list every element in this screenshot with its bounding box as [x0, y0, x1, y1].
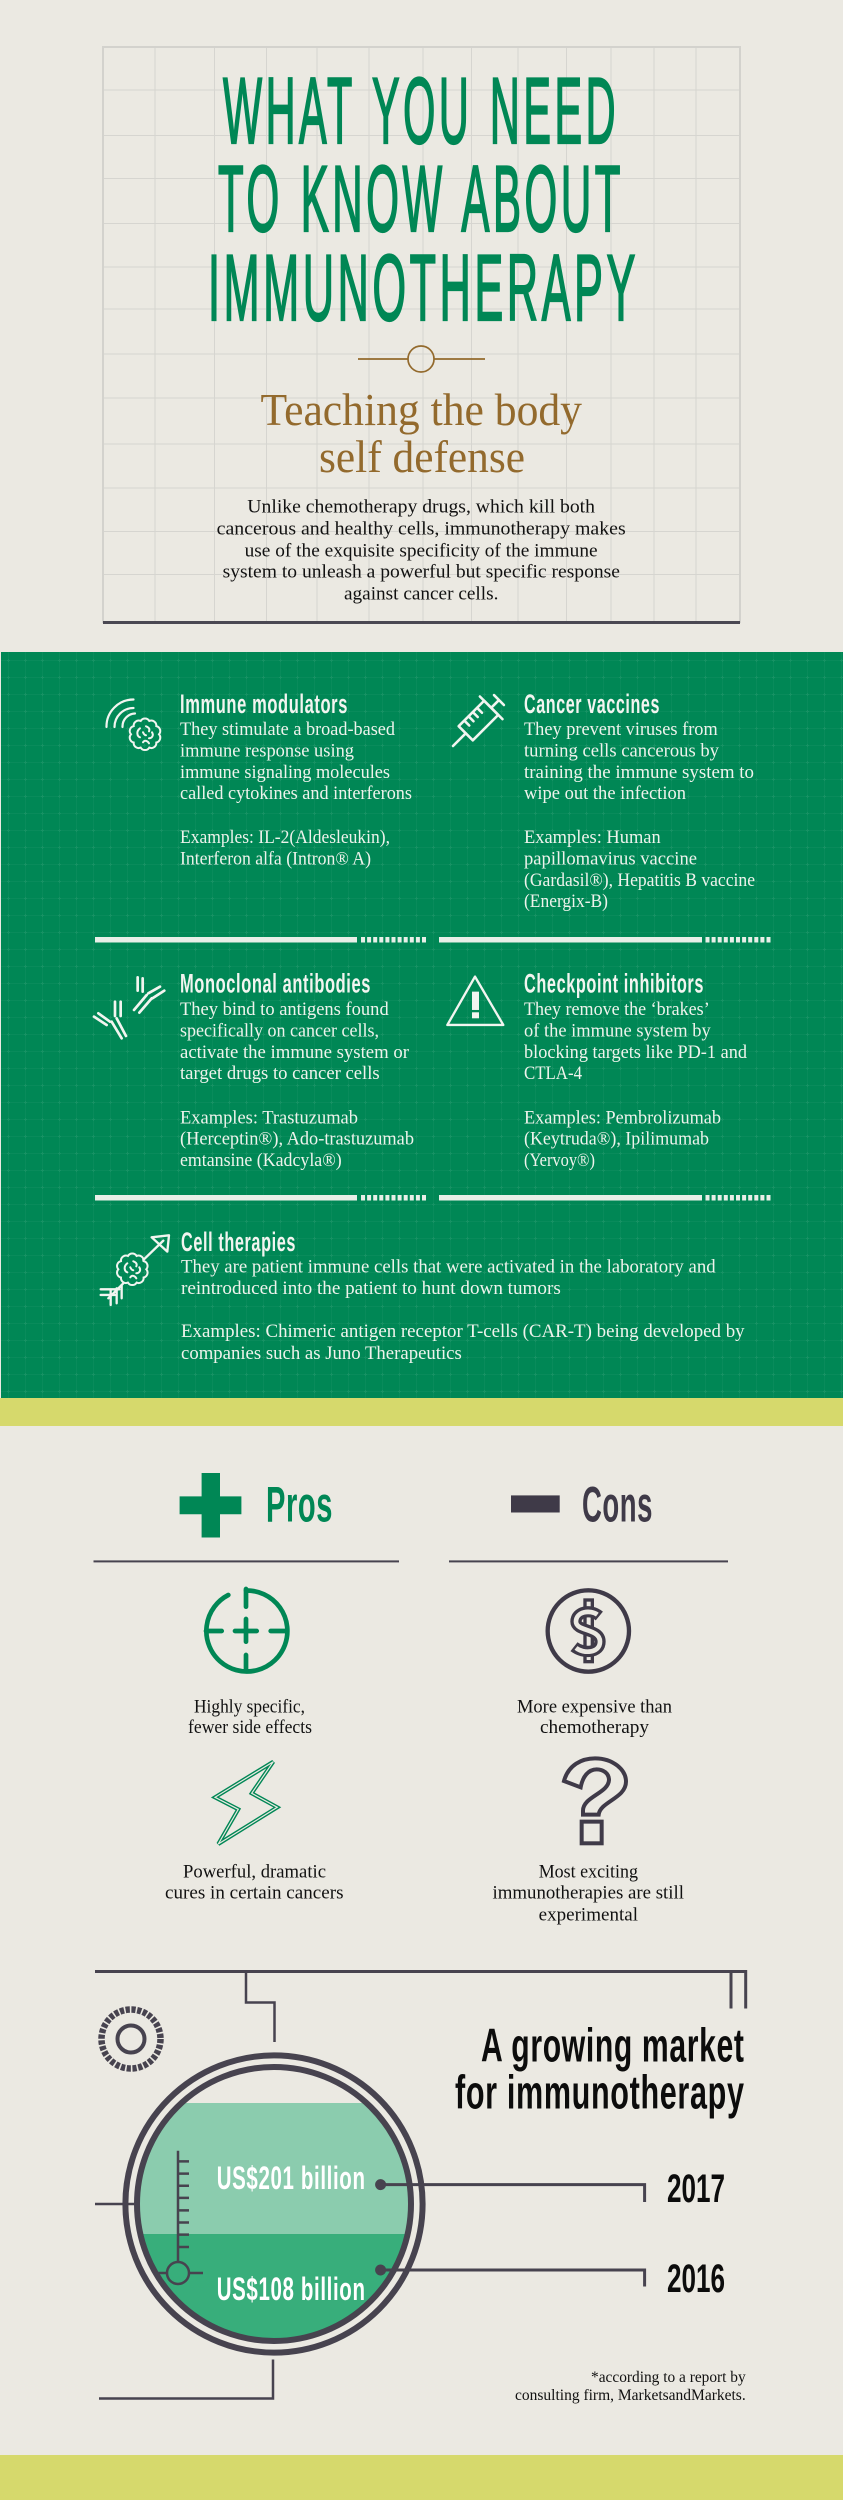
icon: plus: [180, 1473, 241, 1538]
description: immune signaling molecules: [180, 762, 390, 783]
text: most exciting: [492, 1862, 684, 1926]
description: Examples: Pembrolizumab: [524, 1108, 721, 1128]
description: [524, 719, 755, 912]
icon: dollar coin: [548, 1590, 629, 1672]
subtitle: Teaching the body: [260, 384, 582, 435]
description: (Gardasil®), Hepatitis B vaccine: [524, 870, 755, 891]
footnote: *according to a report by: [591, 2369, 746, 2386]
description: (Herceptin®), Ado-trastuzumab: [180, 1128, 414, 1150]
description: papillomavirus vaccine: [524, 848, 697, 869]
icon: cell with arrow: [101, 1235, 169, 1305]
icon: signal waves and cell: [106, 700, 160, 750]
text: highly specific: fewer side effects: [188, 1718, 312, 1738]
heading: growing market: [455, 2018, 745, 2119]
icon: gear ring: [102, 2010, 160, 2068]
text: highly specific: Highly specific,: [194, 1698, 305, 1718]
monoclonal antibodies block: [94, 969, 414, 1171]
description: Examples: Human: [524, 827, 661, 848]
heading: pros: Pros: [266, 1476, 333, 1532]
description: Examples: IL-2(Aldesleukin),: [180, 827, 390, 848]
description: blocking targets like PD-1 and: [524, 1042, 747, 1063]
description: They stimulate a broad-based: [180, 719, 395, 740]
checkpoint inhibitors block: [447, 969, 747, 1171]
icon: syringe: [442, 689, 510, 757]
description: specifically on cancer cells,: [180, 1021, 379, 1042]
description: Interferon alfa (Intron® A): [180, 848, 371, 869]
panel: types of immunotherapy: [1, 652, 843, 1398]
description: reintroduced into the patient to hunt down tumors: [181, 1278, 561, 1299]
intro paragraph: [217, 496, 626, 604]
value: 2017: US$201 billion: [217, 2160, 366, 2196]
band: bottom stripe: [0, 2455, 843, 2500]
description: [180, 999, 414, 1171]
description: [524, 999, 747, 1171]
icon: antibodies: [94, 977, 164, 1038]
text: more expensive: More expensive than: [517, 1698, 672, 1718]
title: [208, 58, 639, 340]
text: highly specific: [188, 1698, 312, 1738]
panel: intro grid card: [103, 46, 740, 624]
intro paragraph: cancerous and healthy cells, immunotherapy makes: [217, 518, 626, 540]
ornament: line and circle: [358, 346, 485, 372]
intro paragraph: use of the exquisite specificity of the immune: [245, 540, 598, 562]
heading: Cell therapies: [181, 1227, 296, 1257]
description: They prevent viruses from: [524, 719, 718, 740]
thermometer scale: [159, 2151, 203, 2284]
icon: lightning bolt: [215, 1762, 277, 1844]
label: 2016: 2016: [667, 2257, 725, 2301]
band: yellow-green stripe: [0, 1398, 843, 1426]
value: 2016: US$108 billion: [217, 2271, 366, 2307]
description: wipe out the infection: [524, 783, 686, 804]
leader line: 2016: [377, 2266, 645, 2286]
immune modulators block: [106, 689, 412, 869]
panel: growing market: [95, 1972, 746, 2404]
description: (Yervoy®): [524, 1150, 595, 1171]
description: [181, 1257, 745, 1364]
description: (Keytruda®), Ipilimumab: [524, 1128, 709, 1150]
description: emtansine (Kadcyla®): [180, 1150, 342, 1171]
subtitle: self defense: [319, 431, 525, 482]
text: powerful: [165, 1862, 344, 1904]
description: [180, 719, 412, 869]
description: They remove the ‘brakes’: [524, 999, 710, 1020]
footnote: [515, 2369, 746, 2404]
description: They bind to antigens found: [180, 999, 389, 1020]
description: training the immune system to: [524, 762, 754, 783]
text: powerful: Powerful, dramatic: [183, 1862, 326, 1882]
chart: lens gauge with market levels: [125, 2055, 423, 2354]
text: most exciting: immunotherapies are still: [492, 1884, 684, 1904]
description: activate the immune system or: [180, 1042, 410, 1063]
cancer vaccines block: [442, 689, 755, 912]
text: powerful: cures in certain cancers: [165, 1884, 344, 1904]
icon: warning triangle: [447, 977, 503, 1025]
icon: question mark: [564, 1758, 626, 1843]
intro paragraph: against cancer cells.: [344, 584, 498, 604]
description: called cytokines and interferons: [180, 783, 412, 804]
intro paragraph: system to unleash a powerful but specific response: [223, 562, 620, 582]
label: 2017: 2017: [667, 2167, 725, 2211]
text: more expensive: chemotherapy: [540, 1718, 650, 1738]
heading: Immune modulators: [180, 689, 348, 719]
leader line: 2017: [377, 2181, 645, 2202]
panel: pros: [94, 1473, 399, 1904]
cell therapies block: [101, 1227, 745, 1364]
description: CTLA-4: [524, 1063, 582, 1084]
heading: cons: Cons: [582, 1476, 653, 1532]
description: target drugs to cancer cells: [180, 1063, 380, 1084]
description: They are patient immune cells that were activated in the laboratory and: [181, 1257, 716, 1278]
panel: cons: [449, 1476, 728, 1926]
heading: Cancer vaccines: [524, 689, 660, 719]
description: (Energix-B): [524, 891, 608, 912]
icon: minus: [511, 1495, 560, 1512]
description: turning cells cancerous by: [524, 741, 719, 762]
description: immune response using: [180, 741, 354, 762]
footnote: consulting firm, MarketsandMarkets.: [515, 2387, 746, 2404]
circuit lines: [95, 1972, 746, 2398]
text: more expensive: [517, 1698, 672, 1738]
text: most exciting: experimental: [539, 1906, 638, 1926]
heading: Monoclonal antibodies: [180, 969, 371, 999]
subtitle: [260, 384, 582, 482]
description: companies such as Juno Therapeutics: [181, 1343, 462, 1364]
description: Examples: Trastuzumab: [180, 1108, 358, 1128]
description: Examples: Chimeric antigen receptor T-cells (CAR-T) being developed by: [181, 1321, 745, 1342]
intro paragraph: Unlike chemotherapy drugs, which kill both: [247, 496, 596, 518]
heading: Checkpoint inhibitors: [524, 969, 704, 999]
text: most exciting: Most exciting: [539, 1862, 638, 1882]
description: of the immune system by: [524, 1021, 711, 1042]
icon: target: [206, 1589, 287, 1671]
